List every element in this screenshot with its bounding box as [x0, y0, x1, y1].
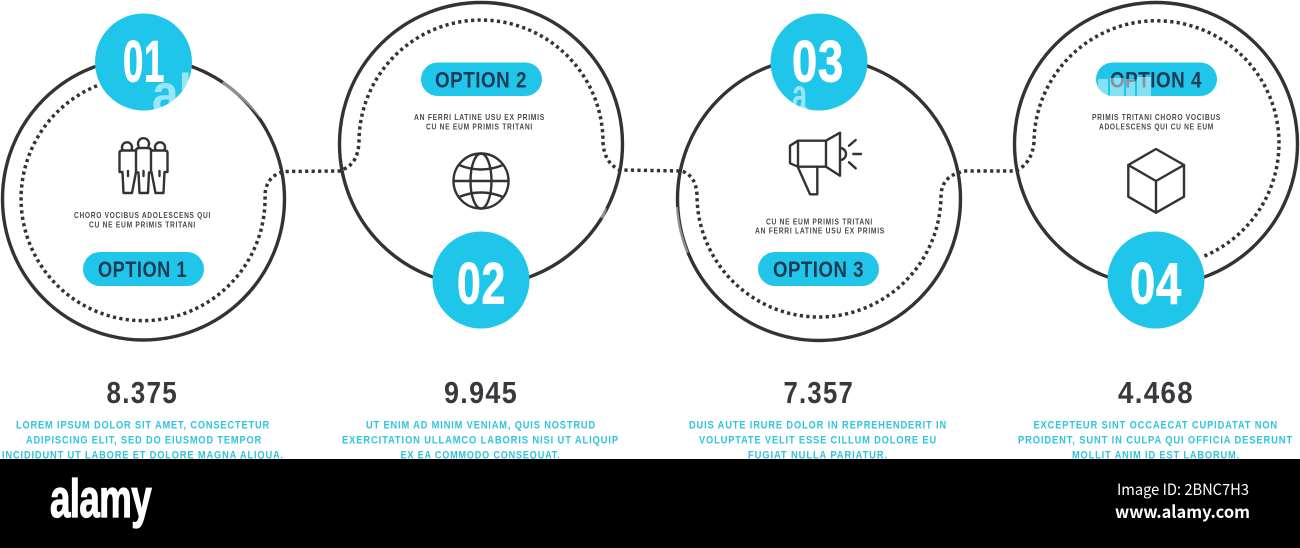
statistic 3: 7.357	[784, 375, 854, 410]
pill: option 2	[421, 62, 542, 96]
logo: alamy: alamy	[50, 469, 152, 529]
caption 2	[414, 112, 545, 132]
panel: option 4	[1014, 2, 1298, 328]
icon: cube	[1128, 149, 1184, 213]
outer ring 2	[340, 2, 622, 286]
number badge 04: 04	[1130, 252, 1182, 316]
description 3: VOLUPTATE VELIT ESSE CILLUM DOLORE EU	[699, 434, 937, 446]
icon: people	[120, 138, 168, 193]
number badge 03: 03	[792, 30, 844, 94]
caption 1: CU NE EUM PRIMIS TRITANI	[89, 220, 196, 230]
pill: option 1	[83, 252, 204, 286]
number badge 04	[1108, 232, 1204, 328]
description 1: ADIPISCING ELIT, SED DO EIUSMOD TEMPOR	[26, 434, 262, 446]
caption 1	[74, 210, 211, 230]
caption 3	[755, 216, 885, 236]
description 2: EX EA COMMODO CONSEQUAT.	[400, 449, 560, 461]
icon: globe	[454, 154, 508, 208]
statistic 1: 8.375	[106, 375, 178, 410]
description 1: INCIDIDUNT UT LABORE ET DOLORE MAGNA ALIQUA.	[2, 449, 284, 461]
pill: option 4	[1096, 62, 1217, 96]
description 1	[2, 419, 284, 461]
pill: option 1: OPTION 1	[98, 257, 187, 282]
panel: option 2	[340, 2, 622, 328]
caption 4: PRIMIS TRITANI CHORO VOCIBUS	[1092, 112, 1221, 122]
statistic 4: 4.468	[1118, 375, 1194, 410]
statistic 2: 9.945	[444, 375, 518, 410]
number badge 02: 02	[457, 252, 506, 316]
footer band	[0, 459, 1300, 548]
number badge 01: al	[152, 62, 192, 125]
caption 1: CHORO VOCIBUS ADOLESCENS QUI	[74, 210, 211, 220]
number badge 01: 01	[123, 30, 165, 94]
pill: option 3: OPTION 3	[773, 257, 864, 282]
outer ring 3	[678, 58, 960, 340]
description 4: MOLLIT ANIM ID EST LABORUM.	[1072, 449, 1240, 461]
caption 3: CU NE EUM PRIMIS TRITANI	[766, 216, 873, 226]
description 3: FUGIAT NULLA PARIATUR.	[748, 449, 888, 461]
description 1: LOREM IPSUM DOLOR SIT AMET, CONSECTETUR	[16, 419, 270, 431]
image id: Image ID: 2BNC7H3	[1117, 478, 1249, 500]
number badge 02	[432, 232, 530, 328]
description 2: EXERCITATION ULLAMCO LABORIS NISI UT ALIQUIP	[342, 434, 619, 446]
panel: option 1	[2, 14, 284, 340]
description 2	[342, 419, 619, 461]
website: www.alamy.com	[1115, 498, 1250, 523]
caption 2: AN FERRI LATINE USU EX PRIMIS	[414, 112, 545, 122]
outer ring 4	[1014, 2, 1298, 286]
number badge 01	[95, 14, 192, 110]
pill: option 4: OPTION 4	[1110, 68, 1202, 92]
dotted connector path	[21, 20, 1279, 321]
icon: megaphone	[790, 133, 861, 194]
description 4	[1018, 419, 1293, 461]
pill: option 2: OPTION 2	[435, 68, 527, 92]
caption 2: CU NE EUM PRIMIS TRITANI	[426, 122, 533, 132]
number badge 03: a	[792, 69, 807, 121]
caption 4: ADOLESCENS QUI CU NE EUM	[1099, 122, 1214, 132]
description 3: DUIS AUTE IRURE DOLOR IN REPREHENDERIT IN	[689, 419, 947, 431]
outer ring 1	[2, 58, 284, 340]
description 2: UT ENIM AD MINIM VENIAM, QUIS NOSTRUD	[366, 419, 596, 431]
number badge 03	[770, 14, 868, 121]
caption 4	[1092, 112, 1221, 132]
pill: option 3	[758, 252, 879, 286]
panel: option 3	[678, 14, 960, 340]
description 3	[689, 419, 947, 461]
caption 3: AN FERRI LATINE USU EX PRIMIS	[755, 226, 885, 236]
